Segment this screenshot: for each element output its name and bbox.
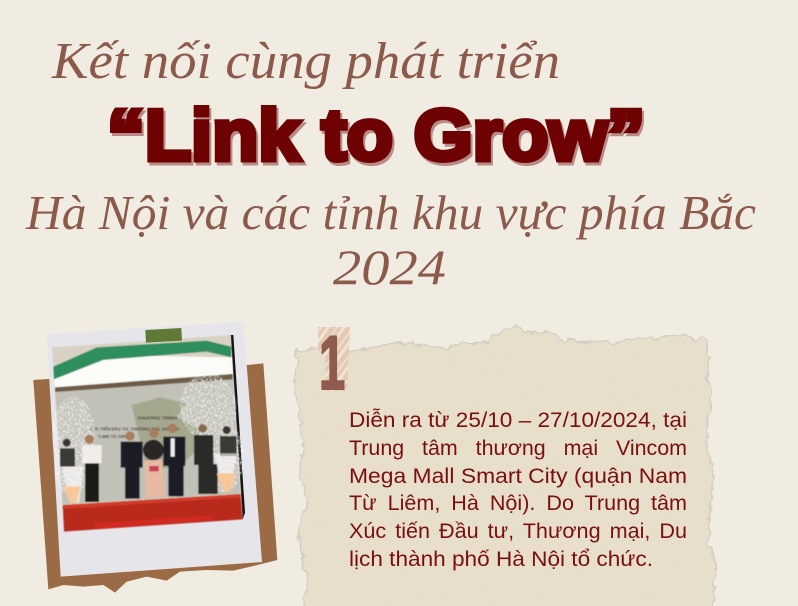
panel: torn paper (295, 325, 717, 606)
screen text: CHƯƠNG TRÌNH (137, 413, 177, 421)
body text: Xúc tiến Đầu tư, Thương mại, Du (349, 519, 687, 543)
body text: lịch thành phố Hà Nội tổ chức. (349, 547, 653, 571)
black photo edge (231, 335, 245, 519)
screen (55, 374, 241, 504)
number badge: 1 (319, 322, 345, 406)
title: Link to Grow: “Link to Grow” (107, 96, 645, 176)
screen text (90, 413, 179, 439)
screen text: XÚC TIẾN ĐẦU TƯ, THƯƠNG MẠI, DU LỊCH (90, 427, 179, 432)
green ceiling band (53, 341, 231, 379)
title: Link to Grow: “Link to Grow” (109, 99, 647, 179)
polaroid frame (47, 322, 262, 577)
body text: Trung tâm thương mại Vincom (349, 436, 687, 460)
green tape (145, 328, 182, 343)
body text (349, 407, 687, 571)
body text: Diễn ra từ 25/10 – 27/10/2024, tại (349, 407, 687, 432)
people (60, 424, 237, 502)
kraft paper backing (33, 363, 277, 593)
sparkler flames (62, 453, 237, 503)
podium with sphere (143, 440, 165, 498)
photograph (52, 335, 244, 532)
sparklers (52, 373, 244, 495)
body text: Từ Liêm, Hà Nội). Do Trung tâm (349, 491, 687, 515)
stage (63, 494, 243, 532)
year: 2024 (333, 239, 446, 295)
panel: photo card (33, 322, 277, 593)
title line 3: Hà Nội và các tỉnh khu vực phía Bắc (25, 185, 756, 240)
body text: Mega Mall Smart City (quận Nam (349, 464, 687, 488)
title line 1: Kết nối cùng phát triển (51, 33, 560, 90)
map shape on screen (132, 397, 200, 470)
screen text: “LINK TO GROW” (97, 434, 134, 439)
